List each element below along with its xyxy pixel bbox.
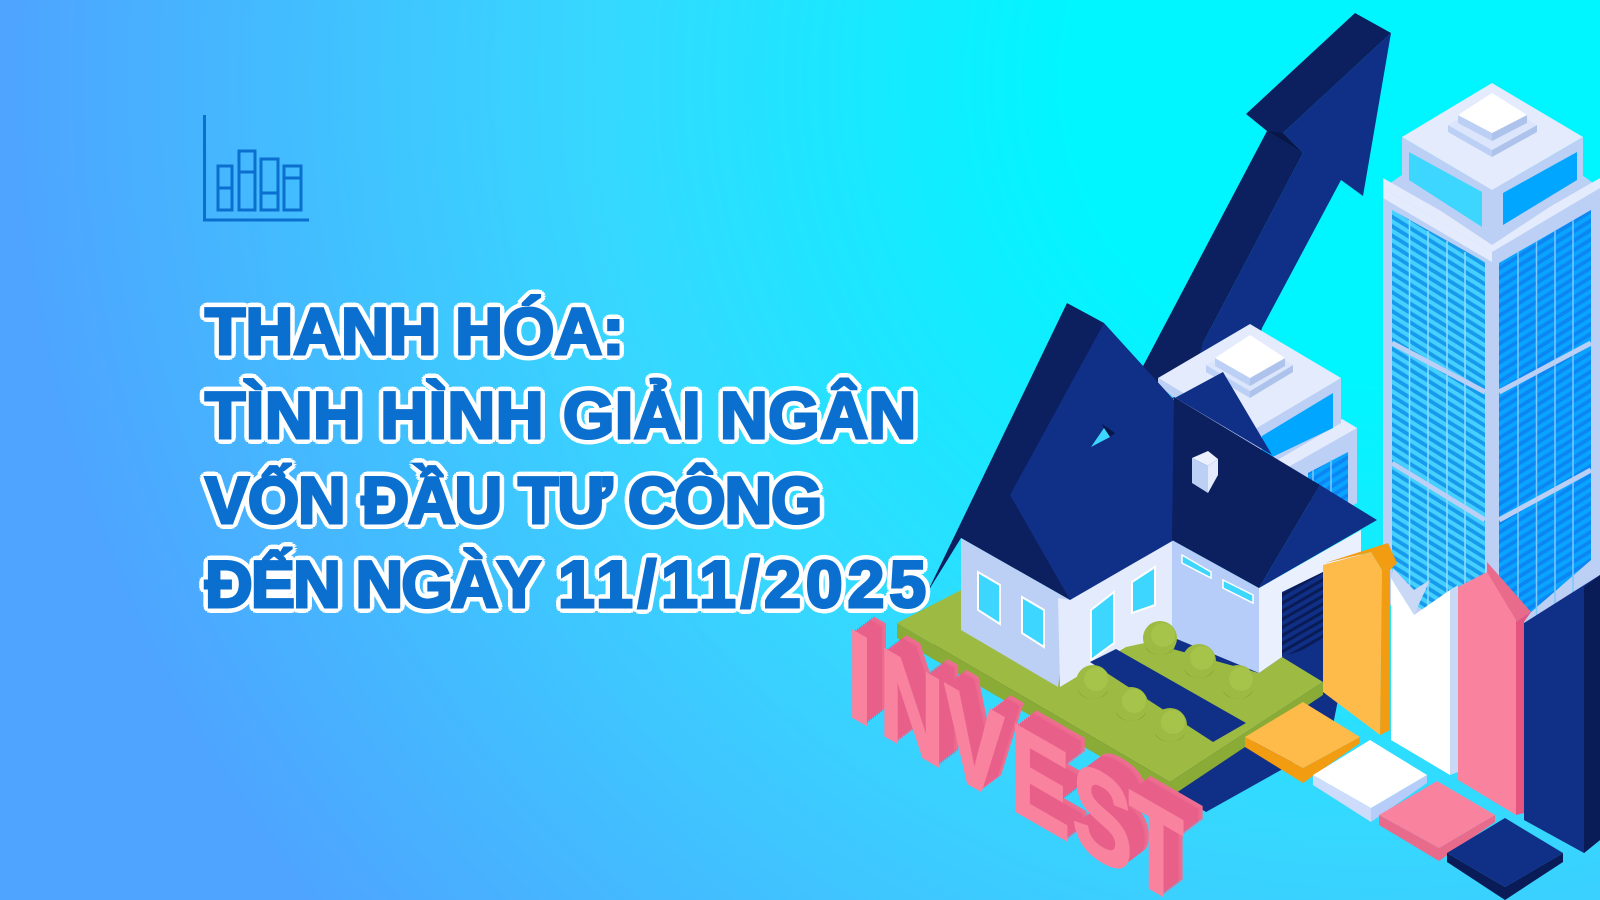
bar: white column	[1391, 568, 1458, 775]
title: TÌNH HÌNH GIẢI NGÂN	[205, 378, 917, 452]
bushes	[1076, 621, 1255, 742]
tile: pink	[1379, 781, 1495, 861]
tile: navy	[1447, 818, 1563, 900]
title: VỐN ĐẦU TƯ CÔNG	[205, 463, 821, 537]
tile: orange	[1245, 702, 1360, 783]
roof faces	[1010, 323, 1174, 600]
roof hole	[1102, 424, 1115, 437]
base: navy platform under the house	[925, 600, 1340, 812]
house walls	[961, 538, 1070, 687]
walkway	[1090, 649, 1246, 742]
building: tall tower	[1383, 83, 1600, 680]
lawn	[897, 590, 1323, 797]
building: small tower	[1158, 324, 1357, 510]
title: 11/11/2025	[558, 547, 931, 621]
roof back face	[927, 303, 1104, 600]
bar: pink column	[1458, 562, 1531, 815]
title: ĐẾN NGÀY	[205, 547, 539, 621]
house	[927, 303, 1377, 687]
bar: navy column	[1524, 575, 1600, 853]
chimney	[1192, 451, 1218, 466]
title: THANH HÓA:	[205, 294, 624, 368]
windows	[978, 572, 1000, 624]
arrow: rising investment	[1125, 13, 1391, 400]
tile: white	[1313, 740, 1427, 822]
bar: orange column	[1323, 543, 1397, 735]
